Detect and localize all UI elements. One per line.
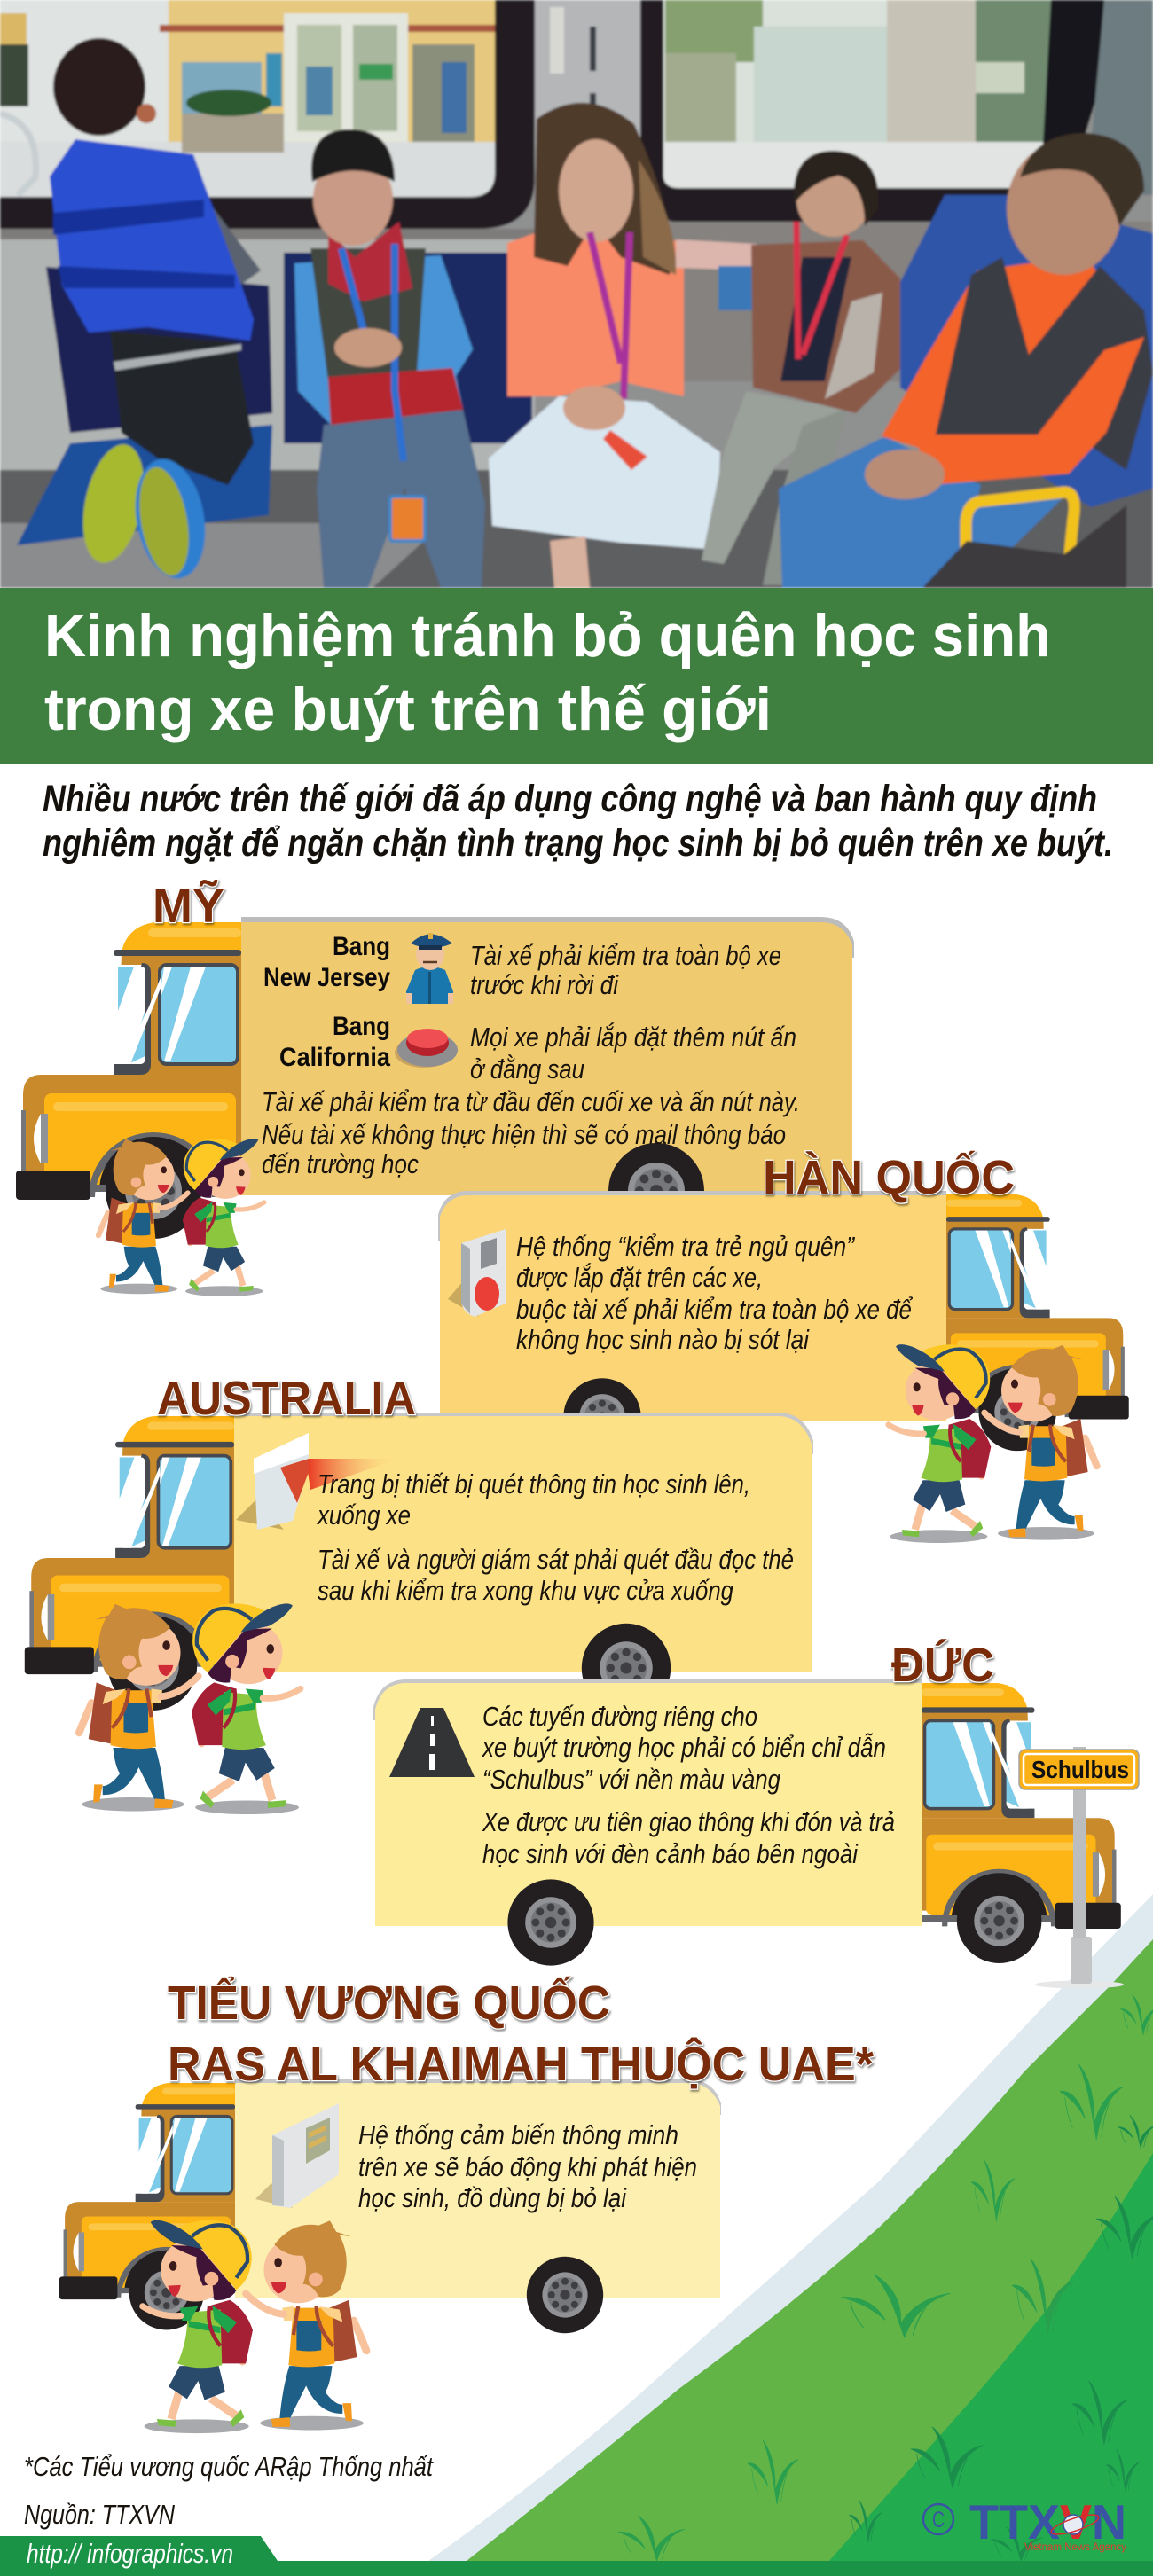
text: Australia: sau khi kiểm tra xong khu vực cửa xuống bbox=[318, 1575, 733, 1606]
logo: TTXVN: Vietnam News Agency bbox=[1024, 2542, 1126, 2553]
text: New Jersey label: Bang bbox=[333, 932, 390, 961]
text: California label: California bbox=[279, 1043, 390, 1072]
source: Nguồn: TTXVN bbox=[24, 2499, 175, 2530]
panel: My bbox=[241, 917, 854, 1195]
icon: alarm panel bbox=[255, 2103, 339, 2208]
bus stop sign: Schulbus: Schulbus bbox=[1031, 1756, 1129, 1783]
bus front: Australia bbox=[25, 1416, 234, 1711]
text: Australia: Trang bị thiết bị quét thông tin học sinh lên, bbox=[318, 1468, 750, 1499]
text: California rule: Mọi xe phải lắp đặt thêm nút ấn bbox=[470, 1022, 796, 1053]
section: Australia bbox=[25, 1372, 813, 1814]
text: Australia: Tài xế và người giám sát phải quét đầu đọc thẻ bbox=[318, 1544, 794, 1575]
text: UAE: Hệ thống cảm biến thông minh bbox=[358, 2119, 678, 2150]
icon: sleep-check device bbox=[448, 1229, 506, 1317]
text: Han Quoc: Hệ thống “kiểm tra trẻ ngủ quên” bbox=[516, 1231, 855, 1262]
kid two bbox=[317, 410, 485, 588]
wheel: Han Quoc rear bbox=[563, 1378, 641, 1456]
section: Duc bbox=[373, 1639, 1139, 1988]
logo: TTXVN: TTXVN bbox=[969, 2494, 1126, 2549]
heading: Han Quoc: HÀN QUỐC bbox=[763, 1151, 1015, 1204]
wheel: Duc rear bbox=[507, 1879, 594, 1966]
panel: UAE bbox=[235, 2079, 721, 2298]
children: Han Quoc bbox=[889, 1344, 1097, 1543]
kid one bbox=[110, 331, 254, 485]
icon: card scanner bbox=[236, 1433, 399, 1530]
bus front: Han Quoc bbox=[946, 1194, 1129, 1451]
text: Duc: học sinh với đèn cảnh báo bên ngoài bbox=[482, 1838, 859, 1869]
icon: road bbox=[389, 1708, 475, 1777]
kid five bbox=[779, 436, 1064, 588]
bus front: UAE bbox=[59, 2083, 235, 2329]
heading: UAE: RAS AL KHAIMAH THUỘC UAE* bbox=[168, 2037, 874, 2091]
children: Australia bbox=[79, 1603, 301, 1814]
bottom bar with url: http:// infographics.vn bbox=[27, 2538, 233, 2569]
text: Han Quoc: không học sinh nào bị sót lại bbox=[516, 1324, 810, 1355]
intro text bbox=[43, 778, 1113, 865]
text: Duc: xe buýt trường học phải có biển chỉ dẫn bbox=[481, 1732, 886, 1763]
bus stop sign: Schulbus bbox=[1019, 1747, 1139, 1988]
text: Han Quoc: buộc tài xế phải kiểm tra toàn bộ xe để bbox=[516, 1294, 913, 1325]
bus front: My bbox=[16, 922, 241, 1239]
text: California details: Tài xế phải kiểm tra từ đầu đến cuối xe và ấn nút này. bbox=[262, 1086, 800, 1117]
text: Australia: xuống xe bbox=[316, 1499, 411, 1531]
heading: UAE bbox=[168, 1977, 874, 2091]
bus front: Duc bbox=[922, 1683, 1121, 1963]
text: California details bbox=[262, 1086, 800, 1179]
heading: UAE: TIỂU VƯƠNG QUỐC bbox=[168, 1977, 610, 2030]
bottom bar with url bbox=[0, 2536, 1153, 2576]
kid three bbox=[489, 396, 720, 549]
heading: Australia: AUSTRALIA bbox=[157, 1372, 416, 1425]
wheel: My rear bbox=[608, 1143, 704, 1239]
text: New Jersey rule: Tài xế phải kiểm tra toàn bộ xe bbox=[470, 940, 781, 971]
children: My bbox=[98, 1139, 264, 1296]
text: Duc bbox=[481, 1701, 895, 1869]
text: California details: Nếu tài xế không thực hiện thì sẽ có mail thông báo bbox=[262, 1119, 786, 1150]
children: UAE bbox=[143, 2220, 366, 2433]
text: California rule bbox=[470, 1022, 796, 1084]
heading: Duc: ĐỨC bbox=[891, 1639, 994, 1692]
text: New Jersey rule: trước khi rời đi bbox=[470, 969, 619, 1000]
icon: red button bbox=[395, 1029, 458, 1068]
title band bbox=[0, 588, 1153, 764]
title band: trong xe buýt trên thế giới bbox=[44, 676, 772, 743]
text: Australia bbox=[316, 1468, 794, 1606]
heading: My: MỸ bbox=[153, 880, 224, 933]
section: Han Quoc bbox=[438, 1151, 1129, 1543]
text: California rule: ở đằng sau bbox=[470, 1053, 584, 1084]
text: UAE: học sinh, đồ dùng bị bỏ lại bbox=[358, 2182, 627, 2213]
girl's arm bbox=[676, 239, 757, 270]
text: UAE bbox=[358, 2119, 697, 2213]
text: UAE: trên xe sẽ báo động khi phát hiện bbox=[358, 2151, 697, 2182]
text: California details: đến trường học bbox=[262, 1148, 419, 1179]
text: Han Quoc: được lắp đặt trên các xe, bbox=[516, 1262, 763, 1293]
text: New Jersey label: New Jersey bbox=[263, 963, 390, 992]
kid four bbox=[702, 391, 845, 564]
text: Duc: Các tuyến đường riêng cho bbox=[482, 1701, 757, 1732]
section: Ras Al Khaimah bbox=[59, 1977, 874, 2433]
text: Han Quoc bbox=[516, 1231, 913, 1355]
title band: Kinh nghiệm tránh bỏ quên học sinh bbox=[44, 602, 1051, 669]
text: California label: Bang bbox=[333, 1012, 390, 1041]
panel: Han Quoc bbox=[438, 1191, 946, 1421]
text: Duc: Xe được ưu tiên giao thông khi đón và trả bbox=[482, 1806, 895, 1837]
text: New Jersey label bbox=[263, 932, 390, 992]
text: California label bbox=[279, 1012, 390, 1072]
text: Duc: “Schulbus” với nền màu vàng bbox=[482, 1764, 780, 1795]
section: My bbox=[16, 880, 854, 1296]
icon: police officer bbox=[406, 933, 453, 1004]
footnote: *Các Tiểu vương quốc ARập Thống nhất bbox=[24, 2451, 434, 2482]
logo: TTXVN: C bbox=[932, 2508, 945, 2533]
wheel: Australia rear bbox=[582, 1624, 671, 1712]
wheel: UAE rear bbox=[527, 2257, 603, 2333]
panel: Duc bbox=[373, 1679, 922, 1926]
panel: Australia bbox=[234, 1413, 813, 1672]
green hill background bbox=[428, 1894, 1153, 2576]
text: New Jersey rule bbox=[470, 940, 781, 1000]
photo: children sitting on a school bus bbox=[0, 0, 1153, 588]
